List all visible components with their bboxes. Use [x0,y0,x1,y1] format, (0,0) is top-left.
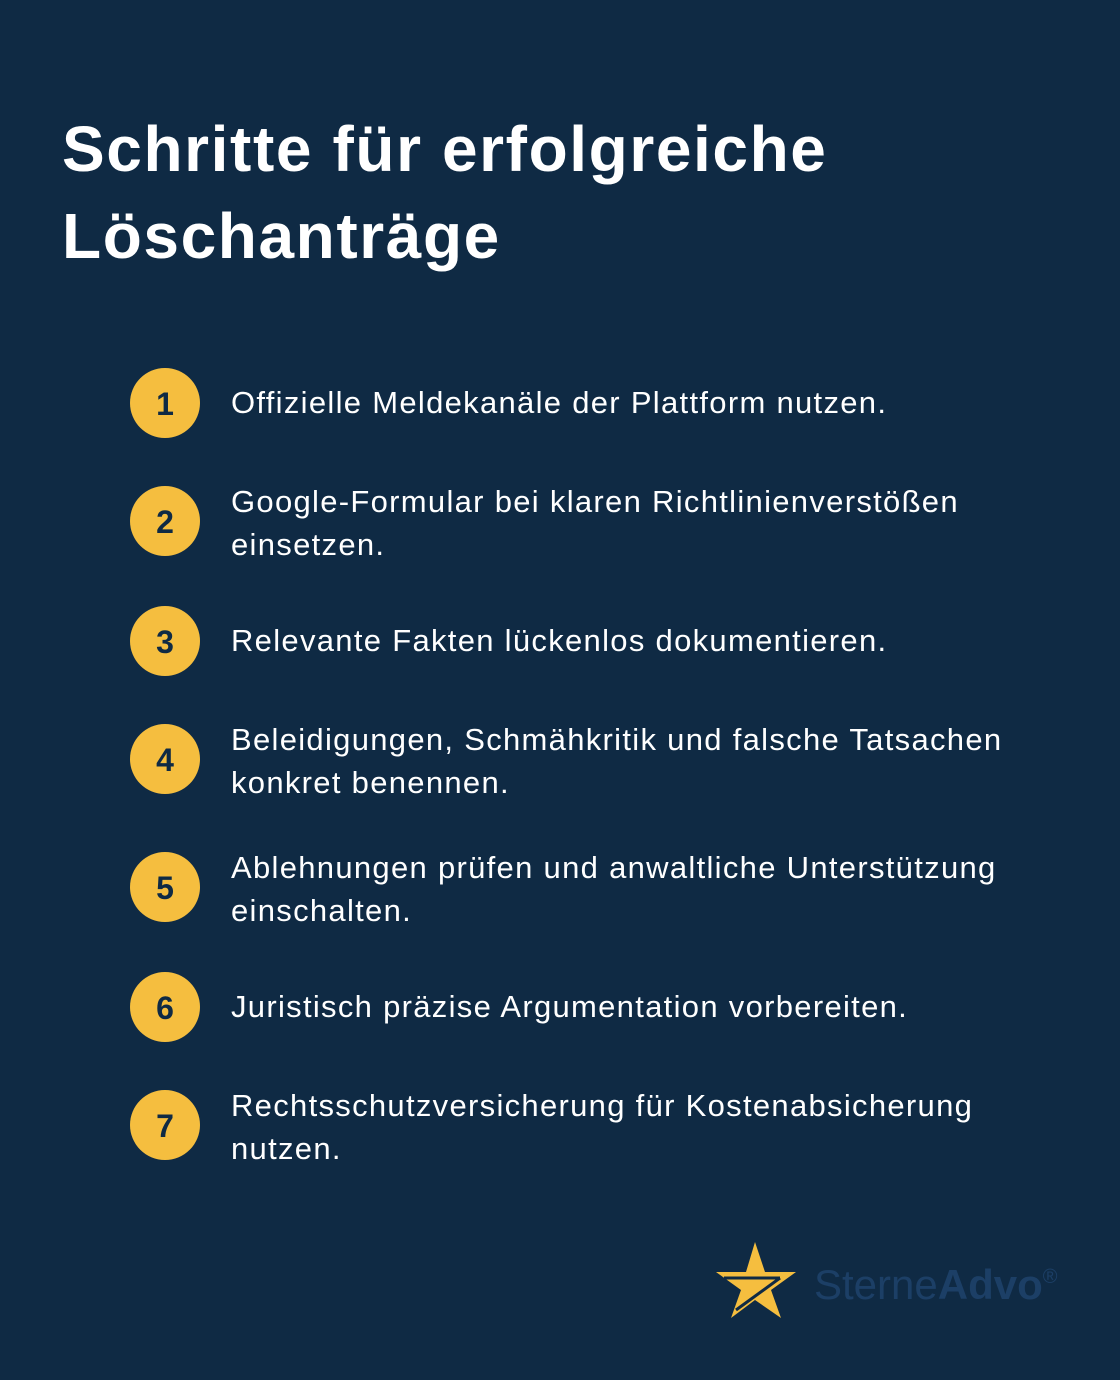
step 3: 3 [156,624,174,660]
title: Schritte für erfolgreiche [62,113,828,185]
step 6: 6 [156,990,174,1026]
step 4 [130,722,1002,800]
step 2 [130,484,959,562]
step 2: einsetzen. [231,527,385,562]
step 2: Google-Formular bei klaren Richtlinienverstößen [231,484,959,519]
step 6 [130,972,908,1042]
step 7: 7 [156,1108,174,1144]
step 4: 4 [156,742,174,778]
step 1: 1 [156,386,174,422]
step 7: nutzen. [231,1131,342,1166]
step 4: Beleidigungen, Schmähkritik und falsche Tatsachen [231,722,1002,757]
step 1: Offizielle Meldekanäle der Plattform nutzen. [231,385,887,420]
step 5: 5 [156,870,174,906]
step 5: Ablehnungen prüfen und anwaltliche Unterstützung [231,850,997,885]
brand name: SterneAdvo® [814,1261,1058,1308]
step 3: Relevante Fakten lückenlos dokumentieren. [231,623,887,658]
title [62,113,828,272]
step 3 [130,606,887,676]
step 1 [130,368,887,438]
step 2: 2 [156,504,174,540]
step 7: Rechtsschutzversicherung für Kostenabsicherung [231,1088,973,1123]
logo [716,1242,1058,1318]
icon: star [716,1242,796,1318]
step 6: Juristisch präzise Argumentation vorbereiten. [231,989,908,1024]
title: Löschanträge [62,200,501,272]
step 5: einschalten. [231,893,412,928]
step 5 [130,850,997,928]
step 7 [130,1088,973,1166]
step 4: konkret benennen. [231,765,510,800]
